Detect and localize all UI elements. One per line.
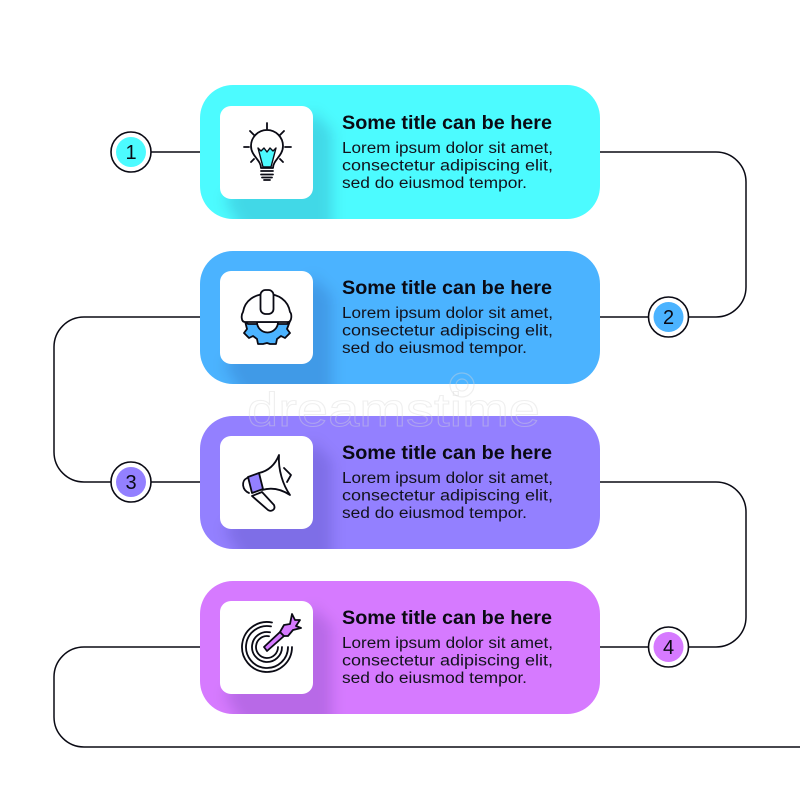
panel: step 3 [200,416,600,562]
icon tile: step 3 [220,436,313,529]
title: step 3: Some title can be here [342,442,552,464]
number badge 1 [111,132,151,172]
shadow: step 3 tile [225,444,334,549]
shadow: step 1 tile [224,112,332,232]
text: step 2: Lorem ipsum dolor sit amet, [342,305,553,322]
text: step 3: Lorem ipsum dolor sit amet, [342,470,553,487]
number badge 4: 4 [663,637,674,659]
text: step 1: sed do eiusmod tempor. [342,175,527,192]
panel: step 1 [200,85,600,232]
icon: light bulb [244,123,291,180]
shadow: step 2 tile [225,279,334,384]
number badge 2: 2 [663,307,674,329]
watermark: dreamstime [247,383,540,436]
title: step 4: Some title can be here [342,607,552,629]
panel: step 4 [200,581,600,727]
icon tile: step 2 [220,271,313,364]
icon tile: step 4 [220,601,313,694]
panel: step 2 [200,251,600,397]
icon: target with arrow [242,614,301,672]
icon: helmet and gear [242,290,291,344]
number badge 3 [111,462,151,502]
title: step 2: Some title can be here [342,277,552,299]
text: step 2: sed do eiusmod tempor. [342,340,527,357]
text: step 3: sed do eiusmod tempor. [342,505,527,522]
number badge 3: 3 [125,472,137,494]
text: step 4: sed do eiusmod tempor. [342,670,527,687]
text: step 4: Lorem ipsum dolor sit amet, [342,635,553,652]
connector line [54,152,800,747]
text: step 2: consectetur adipiscing elit, [342,322,553,340]
text: step 4: consectetur adipiscing elit, [342,652,553,670]
text: step 1: consectetur adipiscing elit, [342,158,553,174]
number badge 1: 1 [125,142,137,164]
icon tile: step 1 [220,106,313,199]
shadow: step 4 tile [224,607,332,727]
text: step 3: consectetur adipiscing elit, [342,488,553,504]
text: step 1: Lorem ipsum dolor sit amet, [342,140,553,157]
number badge 4 [648,627,688,667]
title: step 1: Some title can be here [342,112,552,134]
number badge 2 [648,297,688,337]
icon: megaphone [243,455,291,511]
